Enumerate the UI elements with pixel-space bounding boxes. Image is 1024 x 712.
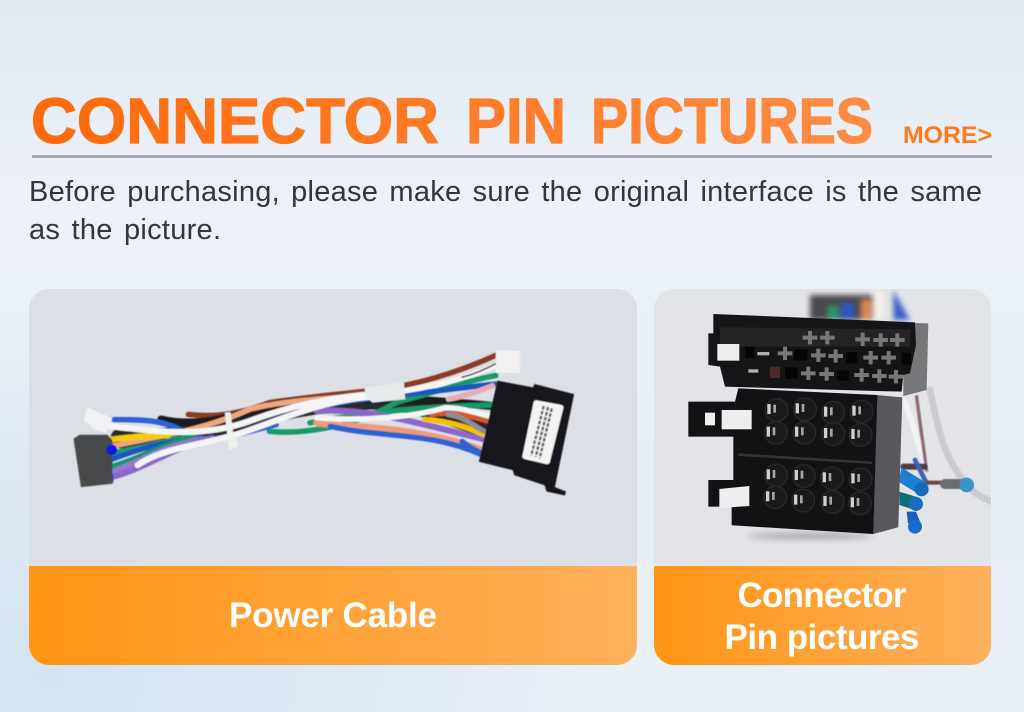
intro text: Before purchasing, please make sure the original interface is the same — [29, 176, 982, 208]
rear wires — [903, 390, 992, 502]
intro text — [29, 176, 982, 246]
latch windows — [705, 410, 752, 508]
left connector — [74, 435, 112, 487]
caption band: connector pin pictures: Pin pictures — [724, 618, 920, 657]
tape label — [365, 382, 405, 403]
upper connector — [708, 314, 928, 396]
title: PIN — [466, 85, 566, 157]
right black connector — [479, 381, 574, 496]
title: PICTURES — [591, 85, 873, 157]
photo: connector block — [688, 290, 992, 539]
title: CONNECTOR — [31, 85, 439, 157]
caption band: power cable — [29, 566, 637, 665]
blue dot — [106, 445, 117, 455]
title — [31, 85, 873, 157]
divider line — [32, 155, 992, 158]
caption band: power cable: Power Cable — [229, 596, 437, 635]
photo: wiring harness — [74, 350, 574, 496]
right white plug — [496, 350, 520, 373]
connector label — [522, 400, 563, 464]
caption band: connector pin pictures — [654, 566, 991, 665]
more link: MORE> — [903, 122, 992, 149]
intro text: as the picture. — [29, 214, 221, 246]
latch window — [717, 344, 739, 361]
panel: power cable — [29, 289, 637, 665]
lower connector body — [688, 388, 902, 534]
panel: connector pin pictures — [654, 289, 992, 665]
caption band: connector pin pictures: Connector — [738, 576, 907, 615]
socket pins — [765, 399, 788, 421]
blue terminals — [898, 468, 974, 534]
left white plug — [84, 407, 112, 433]
blurred wires behind — [810, 290, 910, 320]
cable tie left — [225, 412, 239, 450]
shadow under connector — [747, 533, 873, 539]
